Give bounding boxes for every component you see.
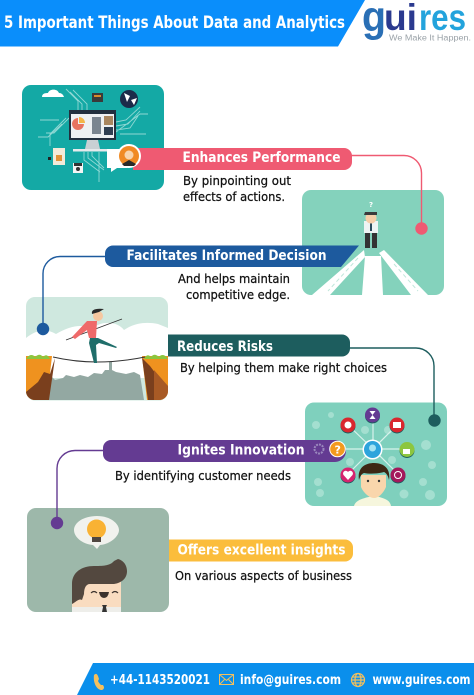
icon: puzzle [390,418,404,434]
panel: performance illustration [22,85,164,190]
spokes [338,415,407,474]
text: phone: +44-1143520021 [110,673,210,688]
rope [53,357,145,362]
text: performance description [183,173,291,204]
icon: speech bubble with bulb [74,516,119,549]
text: decision description: And helps maintain [178,271,290,286]
figure: smiling man [72,559,127,612]
icon: camera [73,163,83,173]
connector: decision [37,256,106,335]
heading: Enhances Performance [182,149,341,166]
logo: guires: We Make It Happen. [389,34,471,42]
icon: envelope [220,674,234,684]
header banner [0,0,365,46]
icon: padlock [400,442,414,458]
icon: avatar [117,144,141,168]
clouds [26,323,168,378]
icon: thinking man [364,201,378,248]
icon: speech bubble [107,149,127,172]
icon: globe [120,90,138,108]
pill: Offers excellent insights [169,540,353,562]
icon: monitor [69,110,121,152]
icon: globe [352,674,364,686]
footer bar [77,663,474,695]
icon: question mark [330,441,345,457]
city skyline [46,362,144,400]
circuit lines [38,89,148,182]
figure: man [354,463,391,506]
icon: hourglass [365,408,380,424]
connector: performance [350,156,428,235]
heading: Facilitates Informed Decision [126,247,326,264]
grass [26,355,168,359]
icon: chip [92,93,103,102]
text: insights description: On various aspects of business [175,568,352,583]
panel: crossroads illustration [302,190,444,295]
icon: thinking man: ? [369,201,373,209]
icon: cloud [42,90,64,97]
text: innovation description: By identifying customer needs [115,468,291,483]
cliffs [26,358,55,400]
icon: alarm [390,468,406,484]
text: performance description: effects of actions. [183,189,285,204]
pill: Reduces Risks [168,334,350,356]
panel: insights illustration [27,508,169,612]
heading: Offers excellent insights [178,542,346,558]
connector: innovation [51,450,104,529]
background doodles [312,412,436,500]
logo: guires [362,0,471,42]
connector: risks [349,348,441,427]
panel: tightrope illustration [26,297,168,400]
icon: document [48,148,65,165]
text: decision description [178,271,290,302]
panel: innovation illustration [305,402,447,506]
heading: Ignites Innovation [178,442,304,458]
title: 5 Important Things About Data and Analytics [4,12,345,32]
icon: small gear [314,444,324,454]
icon: hub bulb [362,440,382,460]
pill: Ignites Innovation [103,440,346,462]
icon: phone [94,674,104,690]
roads [312,250,428,295]
text: performance description: By pinpointing out [183,173,291,188]
figure: walker [66,309,122,363]
pill: Facilitates Informed Decision [105,246,359,267]
text: risks description: By helping them make right choices [180,360,387,375]
ground [26,356,168,400]
icon: question mark: ? [334,444,341,456]
icon: gear [340,418,356,434]
icon: heart [340,468,356,484]
pill: Enhances Performance [117,144,352,170]
heading: Reduces Risks [177,338,273,355]
road markings [328,258,418,291]
text: decision description: competitive edge. [186,287,290,302]
text: email: info@guires.com [240,673,341,688]
